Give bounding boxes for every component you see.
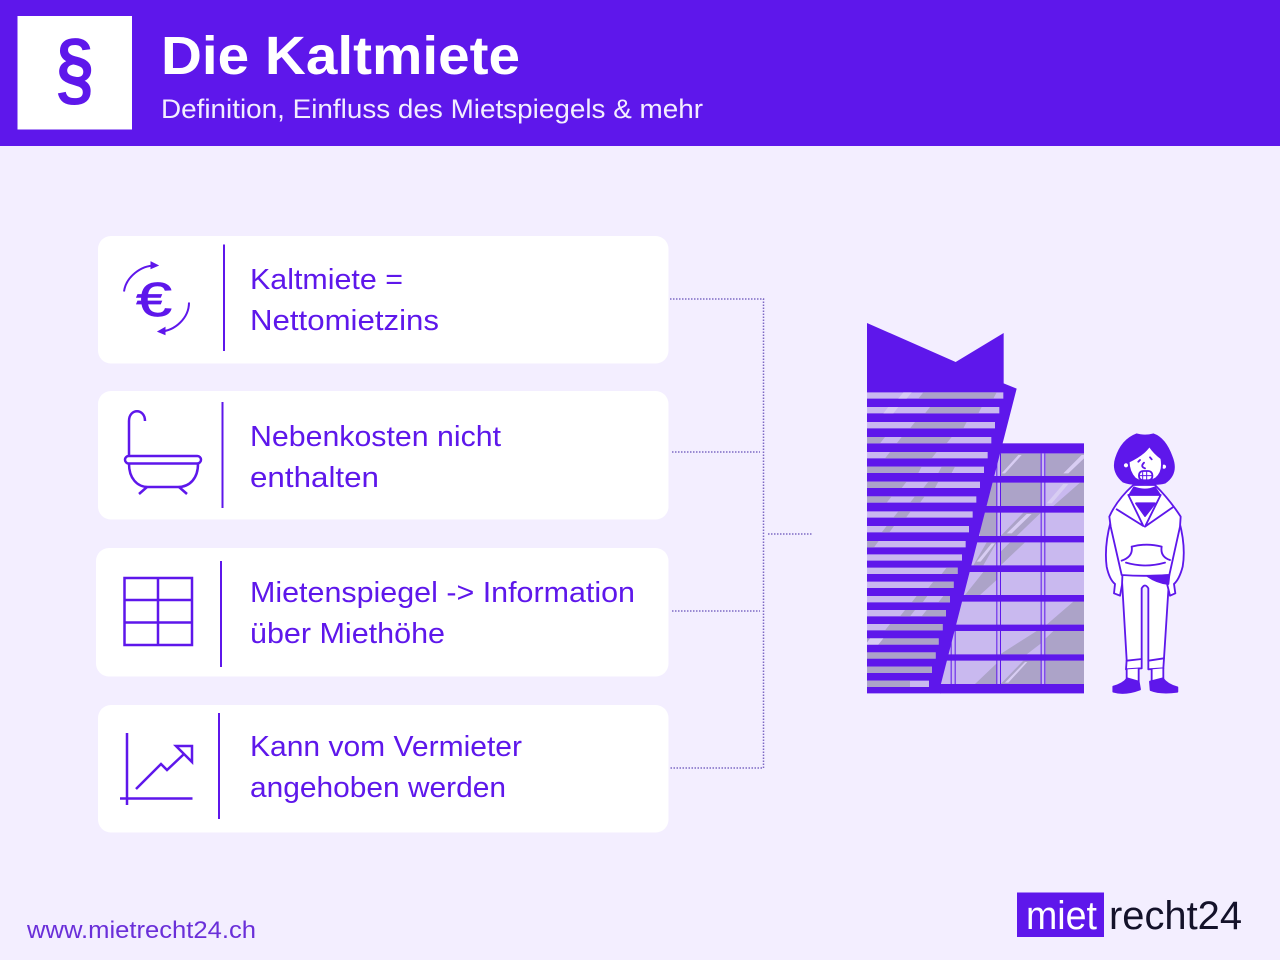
illustration: office buildings xyxy=(867,323,1084,693)
card text: Kaltmiete = xyxy=(250,264,403,296)
icon: euro with cycle arrows: € xyxy=(136,273,172,327)
icon: table grid xyxy=(124,578,192,645)
head and hair xyxy=(1115,434,1174,484)
jacket xyxy=(1109,485,1181,576)
card text: enthalten xyxy=(250,462,379,494)
card text: Nettomietzins xyxy=(250,305,439,337)
icon: paragraph sign: § xyxy=(56,23,94,115)
tower xyxy=(867,323,1017,693)
card text xyxy=(250,577,635,650)
icon: bathtub xyxy=(125,411,201,494)
logo: mietrecht24: recht24 xyxy=(1109,894,1242,938)
arms xyxy=(1106,522,1184,596)
card text xyxy=(250,421,501,494)
low building xyxy=(940,443,1084,693)
title: Die Kaltmiete xyxy=(161,26,520,86)
panel: Kaltmiete = Nettomietzins xyxy=(98,236,668,364)
shoes xyxy=(1113,678,1177,693)
panel: Nebenkosten nicht enthalten xyxy=(98,391,668,520)
icon: rising chart xyxy=(120,733,192,805)
legs xyxy=(1122,575,1169,669)
card text xyxy=(250,264,439,337)
icon: paragraph sign xyxy=(18,16,132,130)
panel: Mietenspiegel xyxy=(96,548,668,676)
card text xyxy=(250,731,523,804)
subtitle: Definition, Einfluss des Mietspiegels & mehr xyxy=(161,94,703,124)
footer website url: www.mietrecht24.ch xyxy=(26,917,256,944)
illustration: standing person xyxy=(1106,434,1184,693)
panel: Kann vom Vermieter angehoben werden xyxy=(98,705,668,832)
card text: angehoben werden xyxy=(250,772,506,804)
dotted connector lines xyxy=(670,299,812,768)
card text: Kann vom Vermieter xyxy=(250,731,523,763)
card text: über Miethöhe xyxy=(250,618,445,650)
card text: Nebenkosten nicht xyxy=(250,421,501,453)
icon: euro with cycle arrows xyxy=(124,262,189,334)
card text: Mietenspiegel -> Information xyxy=(250,577,635,609)
logo: mietrecht24: miet xyxy=(1026,894,1097,938)
logo: mietrecht24 xyxy=(1017,892,1242,938)
header banner xyxy=(0,0,1280,146)
